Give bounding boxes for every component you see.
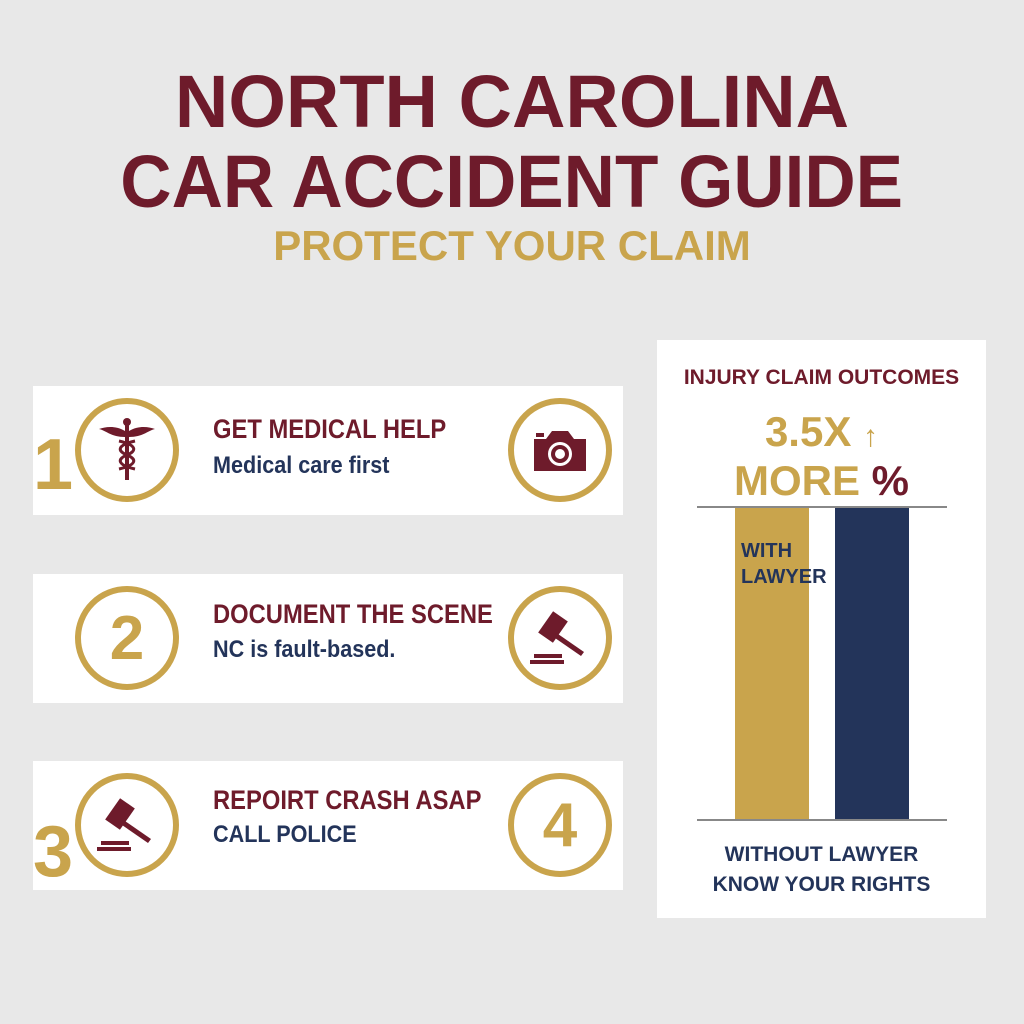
text: CALL POLICE [213,821,357,848]
bar caption [713,843,930,896]
number 2 icon [75,586,179,690]
text: NC is fault-based. [213,636,395,663]
heading: DOCUMENT THE SCENE [213,599,493,629]
number 4 icon: 4 [543,790,577,860]
title: CAR ACCIDENT GUIDE [121,140,903,223]
card 1: get medical help [33,386,623,515]
bar caption: WITHOUT LAWYER [725,843,918,866]
icon: gavel [508,586,612,690]
number 2 icon: 2 [110,604,144,672]
bar: with lawyer: LAWYER [741,566,827,588]
subtitle: PROTECT YOUR CLAIM [273,222,751,269]
bar: with lawyer: WITH [741,540,792,562]
card 3: report crash [33,761,623,890]
heading: GET MEDICAL HELP [213,414,446,444]
heading: REPOIRT CRASH ASAP [213,785,481,815]
icon: camera [508,398,612,502]
icon: gavel [75,773,179,877]
number 4 icon [508,773,612,877]
panel heading: INJURY CLAIM OUTCOMES [684,366,959,389]
number 1: 1 [33,425,73,505]
icon: caduceus [75,398,179,502]
title [121,60,903,223]
panel: injury claim outcomes [657,340,986,918]
bar caption: KNOW YOUR RIGHTS [713,873,930,896]
bar chart [697,506,947,821]
card 2: document the scene [33,574,623,703]
number 3: 3 [33,812,73,892]
stat [734,408,909,504]
title: NORTH CAROLINA [175,60,849,143]
bar: without lawyer [835,508,909,820]
stat: MORE % [734,457,909,504]
stat: 3.5X ↑ [765,408,878,455]
bar: with lawyer [735,508,809,820]
text: Medical care first [213,452,389,479]
